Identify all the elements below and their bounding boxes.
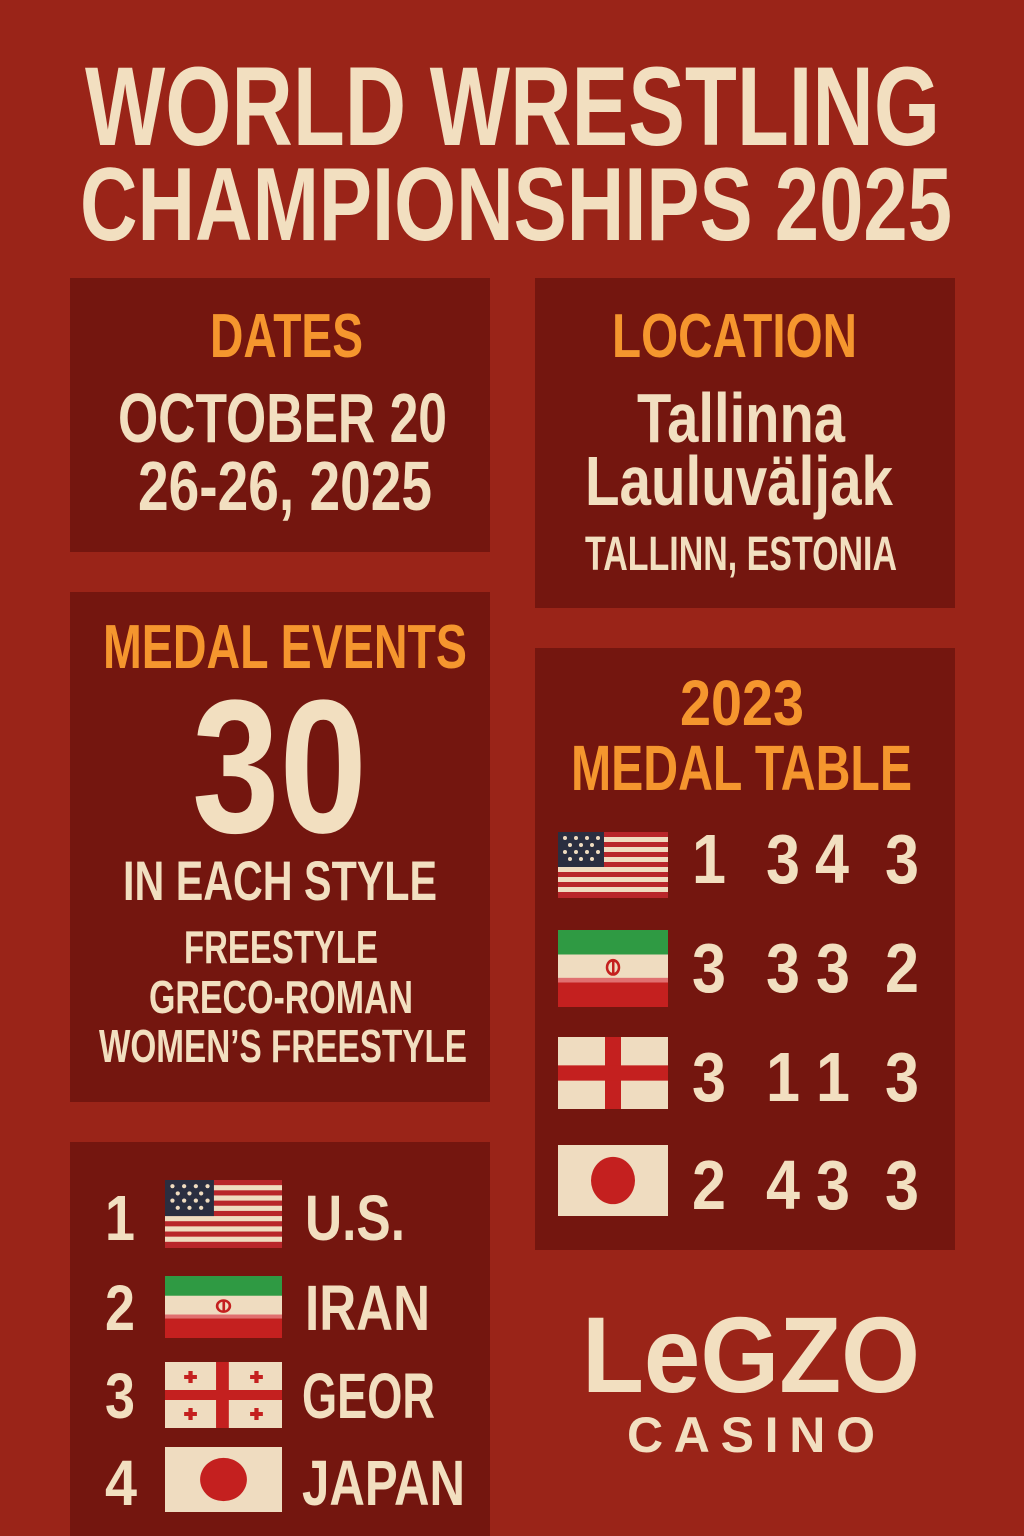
panel: medal events: 30 bbox=[192, 661, 367, 873]
panel: 2023 medal table: 3 bbox=[692, 929, 726, 1007]
panel: ranking: IRAN bbox=[305, 1272, 430, 1344]
panel: 2023 medal table: 2 bbox=[885, 929, 919, 1007]
panel: 2023 medal table: 2023 bbox=[680, 667, 804, 739]
panel: medal events: GRECO-ROMAN bbox=[149, 971, 413, 1023]
panel: 2023 medal table: 1 bbox=[766, 1038, 800, 1116]
title bbox=[80, 44, 952, 263]
panel: ranking: JAPAN bbox=[302, 1447, 465, 1519]
panel: 2023 medal table: 3 bbox=[885, 1038, 919, 1116]
panel: ranking: 3 bbox=[105, 1360, 135, 1432]
panel: ranking: GEOR bbox=[302, 1360, 435, 1432]
panel: 2023 medal table: 3 bbox=[885, 1146, 919, 1224]
panel: 2023 medal table: 3 bbox=[766, 820, 800, 898]
panel: dates: DATES bbox=[210, 302, 363, 371]
panel: medal events bbox=[70, 592, 490, 1102]
logo bbox=[582, 1294, 920, 1463]
panel: 2023 medal table: 1 bbox=[816, 1038, 850, 1116]
panel: location: TALLINN, ESTONIA bbox=[585, 528, 897, 581]
panel: 2023 medal table bbox=[535, 648, 955, 1250]
panel: dates: 26-26, 2025 bbox=[138, 447, 432, 525]
panel: ranking: U.S. bbox=[305, 1182, 405, 1254]
panel: location: Lauluväljak bbox=[585, 442, 893, 520]
panel: ranking bbox=[70, 1142, 490, 1536]
panel: ranking: 2 bbox=[105, 1272, 135, 1344]
logo: LeGZO bbox=[582, 1294, 920, 1415]
panel: 2023 medal table: 4 bbox=[766, 1146, 800, 1224]
panel: location bbox=[535, 278, 955, 608]
panel: dates bbox=[70, 278, 490, 552]
panel: medal events: MEDAL EVENTS bbox=[103, 613, 467, 682]
panel: 2023 medal table: 3 bbox=[816, 929, 850, 1007]
panel: 2023 medal table: 1 bbox=[692, 820, 726, 898]
panel: medal events: FREESTYLE bbox=[184, 921, 378, 973]
panel: location: LOCATION bbox=[612, 302, 857, 371]
panel: 2023 medal table: 3 bbox=[816, 1146, 850, 1224]
panel: medal events: IN EACH STYLE bbox=[123, 849, 437, 912]
panel: ranking: 4 bbox=[105, 1447, 137, 1519]
panel: 2023 medal table: 3 bbox=[766, 929, 800, 1007]
panel: 2023 medal table: 2 bbox=[692, 1146, 726, 1224]
panel: 2023 medal table: MEDAL TABLE bbox=[571, 732, 912, 804]
panel: location: Tallinna bbox=[637, 379, 846, 457]
panel: 2023 medal table: 3 bbox=[692, 1038, 726, 1116]
panel: dates: OCTOBER 20 bbox=[118, 379, 447, 457]
logo: CASINO bbox=[627, 1407, 875, 1463]
panel: ranking: 1 bbox=[105, 1182, 135, 1254]
panel: 2023 medal table: 3 bbox=[885, 820, 919, 898]
panel: medal events: WOMEN’S FREESTYLE bbox=[99, 1020, 467, 1072]
panel: 2023 medal table: 4 bbox=[815, 820, 849, 898]
